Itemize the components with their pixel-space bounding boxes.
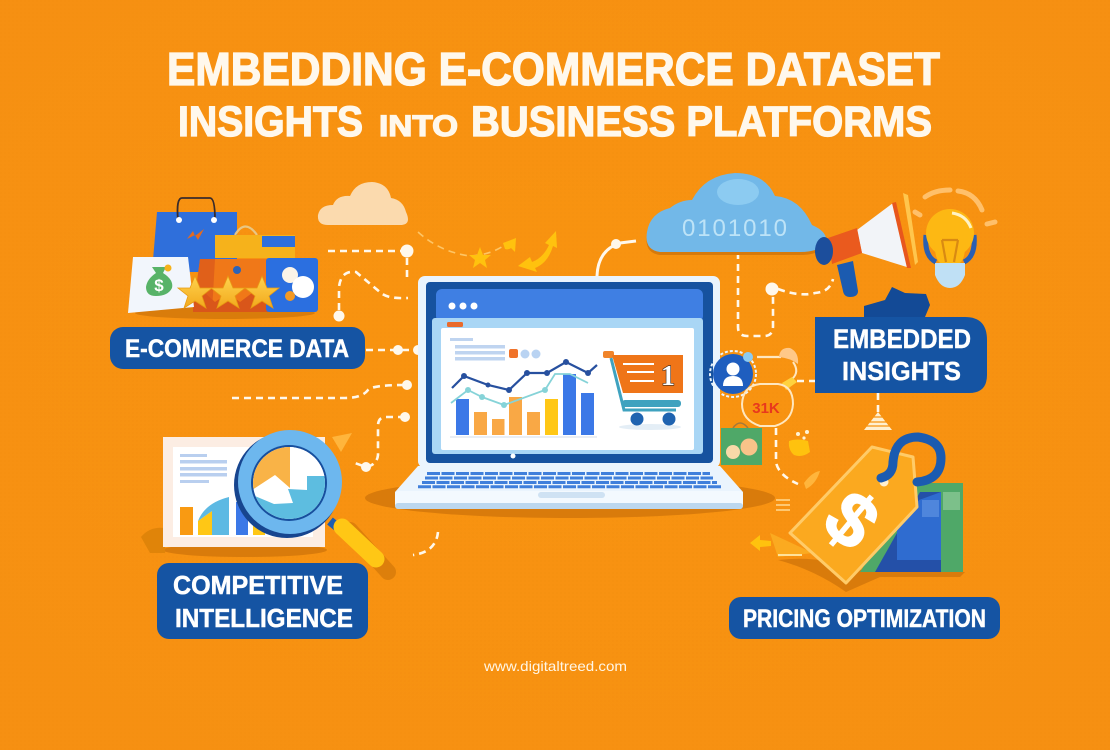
yellow arrows and star <box>469 231 557 272</box>
label: embedded insights: EMBEDDED <box>833 324 971 354</box>
small hand and link <box>757 348 798 390</box>
bar and line chart <box>450 359 597 437</box>
title <box>167 43 940 146</box>
laptop shadow <box>365 478 775 518</box>
icon: blue cloud with binary: 0101010 <box>682 215 787 242</box>
user badge <box>710 351 756 397</box>
label: pricing optimization: PRICING OPTIMIZATION <box>743 605 986 633</box>
green shopping bag <box>721 423 762 465</box>
blue shopping bag <box>152 198 237 272</box>
label: pricing optimization <box>729 597 1000 639</box>
title: INTO <box>379 110 458 143</box>
dollar sign: $ <box>808 474 895 567</box>
label: competitive intelligence <box>157 563 368 639</box>
laptop <box>395 276 743 509</box>
label: embedded insights <box>815 317 987 393</box>
label: embedded insights: INSIGHTS <box>842 356 961 386</box>
icon: price tag with books <box>750 437 965 592</box>
rating stars <box>178 276 279 308</box>
books <box>860 483 963 572</box>
shopping cart <box>603 351 683 430</box>
screen header items <box>447 322 540 360</box>
report card <box>163 437 325 547</box>
label: competitive intelligence: INTELLIGENCE <box>175 603 353 633</box>
navy blob above embedded label <box>864 287 930 317</box>
shopping cart: 1 <box>661 361 675 392</box>
label: e-commerce data: E-COMMERCE DATA <box>125 335 349 363</box>
dashed connectors <box>232 232 878 555</box>
title: EMBEDDING E-COMMERCE DATASET <box>167 43 940 95</box>
magnifier <box>234 430 376 559</box>
laptop lid <box>418 276 720 468</box>
tag <box>790 447 917 583</box>
peach cloud <box>318 182 408 225</box>
title: INSIGHTS <box>178 98 363 146</box>
31K price bubble <box>742 384 793 426</box>
white bag with money: $ <box>154 276 164 295</box>
icon: blue cloud with binary <box>647 173 826 255</box>
back tag <box>750 533 813 557</box>
yellow bag <box>215 226 295 258</box>
title: BUSINESS PLATFORMS <box>471 98 932 146</box>
website url: www.digitaltreed.com <box>483 658 627 674</box>
icon: shopping bags and ratings <box>128 198 318 319</box>
connector dots <box>334 239 778 472</box>
label: competitive intelligence: COMPETITIVE <box>173 572 343 600</box>
white bag with money <box>128 257 194 313</box>
tag loop <box>881 437 941 482</box>
cable from laptop to cloud <box>597 241 636 276</box>
icon: report with magnifier <box>141 430 388 572</box>
orange box <box>193 259 268 312</box>
icon: megaphone <box>815 193 918 297</box>
icon: lightbulb <box>915 190 995 288</box>
31K price bubble: 31K <box>752 400 780 417</box>
blue box <box>266 258 318 312</box>
laptop base and keyboard <box>395 466 743 509</box>
small decorations near pricing <box>776 412 896 510</box>
laptop screen panel <box>441 328 694 450</box>
label: e-commerce data <box>110 327 365 369</box>
